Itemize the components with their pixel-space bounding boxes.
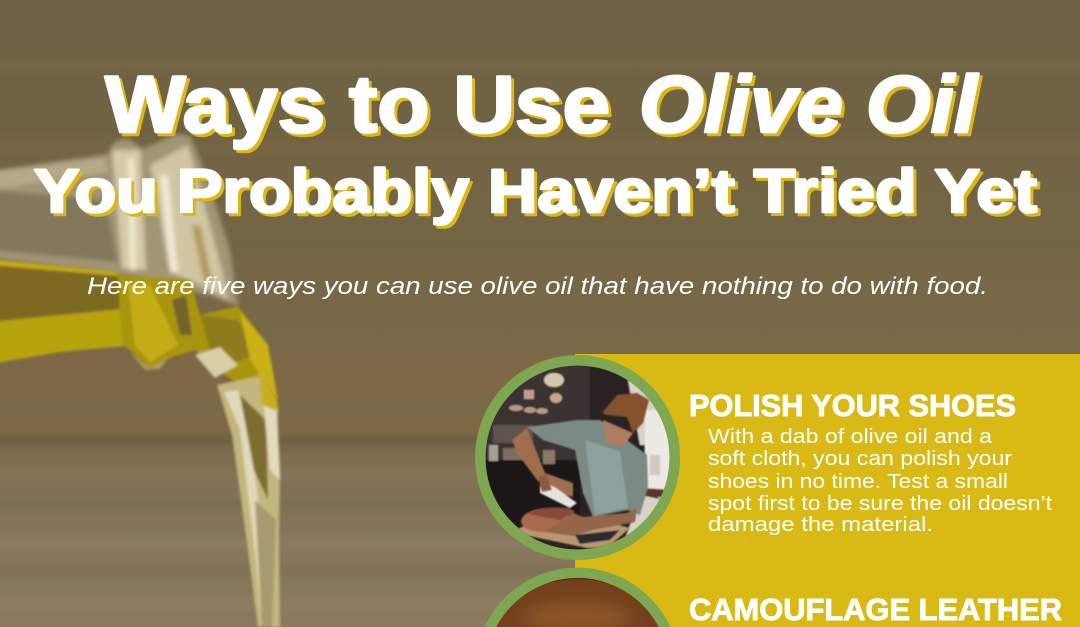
body text: polish your shoes: With a dab of olive oil and a [708,425,993,448]
heading: camouflage leather: CAMOUFLAGE LEATHER [689,593,1062,627]
photo: camouflage leather [484,568,670,627]
body text: polish your shoes: soft cloth, you can polish your [708,447,1012,470]
heading: polish your shoes: POLISH YOUR SHOES [689,389,1016,423]
panel: yellow content panel [575,354,1080,627]
shirt, arm, head [518,524,630,549]
pouring stream [217,370,280,627]
body text: polish your shoes: damage the material. [708,513,933,536]
leather texture [496,578,659,627]
body text: polish your shoes: shoes in no time. Test a small [708,470,1008,493]
ring [484,568,670,627]
oil in the bottle [0,259,278,405]
photo: polishing shoes [480,360,680,560]
glass bottle neck [0,134,238,306]
item: polish your shoes [689,389,1052,536]
body text: polish your shoes [708,425,1052,536]
body text: polish your shoes: spot first to be sure the oil doesn’t [708,492,1052,515]
title [34,60,1037,225]
olive oil bottle and pouring stream [0,134,280,627]
title: You Probably Haven’t Tried Yet [34,157,1037,225]
title: Olive Oil [639,60,979,150]
subtitle: Here are five ways you can use olive oil that have nothing to do with food. [87,273,988,300]
title: Ways to Use [105,60,610,150]
